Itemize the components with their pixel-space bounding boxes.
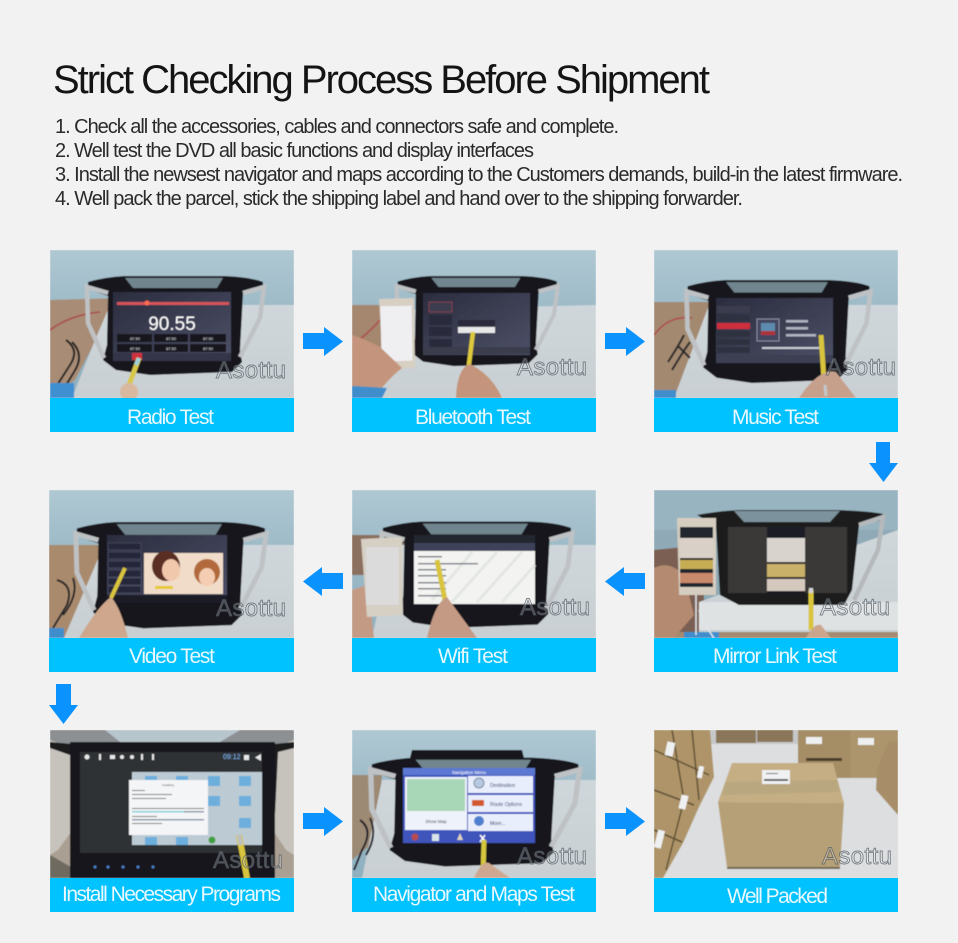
- label: Wifi Test: [438, 645, 508, 668]
- label: Navigator and Maps Test: [373, 883, 575, 906]
- photo: radio test: 87.50: [166, 346, 177, 351]
- photo: install necessary programs: 09:12: [223, 754, 241, 761]
- photo: video test: [49, 490, 294, 638]
- panel: well packed: [654, 730, 898, 912]
- panel: mirror link test: [654, 490, 898, 672]
- text block: checking steps: [55, 116, 903, 210]
- watermark: Asottu: [826, 354, 896, 381]
- photo: navigator and maps test: Navigation Menu: [452, 770, 486, 775]
- arrow: right: [605, 807, 645, 836]
- photo: bluetooth test: [352, 250, 596, 398]
- panel: radio test: [50, 250, 294, 432]
- panel: navigator and maps test: [352, 730, 596, 912]
- photo: install necessary programs: Installing: [162, 783, 174, 787]
- watermark: Asottu: [517, 354, 587, 381]
- title: Strict Checking Process Before Shipment: [53, 58, 710, 102]
- photo: radio test: 87.50: [203, 336, 214, 341]
- label banner: [49, 638, 294, 672]
- photo: navigator and maps test: [352, 730, 596, 878]
- label banner: [654, 638, 898, 672]
- arrow: left: [303, 567, 343, 596]
- text block: checking steps: 2. Well test the DVD all basic functions and display interfaces: [55, 140, 534, 162]
- watermark: Asottu: [822, 843, 892, 870]
- arrow: right: [303, 807, 343, 836]
- label banner: [50, 878, 294, 912]
- watermark: Asottu: [520, 594, 590, 621]
- photo: wifi test: [352, 490, 596, 638]
- photo: navigator and maps test: More...: [490, 821, 506, 827]
- panel: wifi test: [352, 490, 596, 672]
- panel: bluetooth test: [352, 250, 596, 432]
- panel: install necessary programs: [50, 730, 294, 912]
- photo: install necessary programs: [50, 730, 294, 878]
- text block: checking steps: 1. Check all the accessories, cables and connectors safe and complete.: [55, 116, 619, 138]
- text block: checking steps: 4. Well pack the parcel, stick the shipping label and hand over to the shipping forwarder.: [55, 188, 743, 210]
- photo: radio test: 87.50: [203, 346, 214, 351]
- label: Mirror Link Test: [713, 645, 837, 668]
- photo: music test: [654, 250, 898, 398]
- photo: radio test: 87.50: [166, 336, 177, 341]
- arrow: right: [605, 327, 645, 356]
- arrow: down: [49, 684, 78, 724]
- label banner: [352, 398, 596, 432]
- label banner: [50, 398, 294, 432]
- photo: navigator and maps test: Destination: [490, 783, 515, 789]
- label banner: [654, 878, 898, 912]
- watermark: Asottu: [216, 595, 286, 622]
- label: Well Packed: [727, 885, 828, 908]
- arrow: down: [869, 442, 898, 482]
- panel: music test: [654, 250, 898, 432]
- photo: radio test: 87.50: [130, 346, 141, 351]
- photo: radio test: 90.55: [148, 314, 196, 335]
- label banner: [352, 638, 596, 672]
- label: Install Necessary Programs: [62, 883, 281, 906]
- photo: navigator and maps test: Show Map: [425, 819, 447, 824]
- label: Bluetooth Test: [415, 406, 531, 429]
- label banner: [654, 398, 898, 432]
- watermark: Asottu: [213, 847, 283, 874]
- photo: radio test: [50, 250, 294, 398]
- photo: mirror link test: [654, 490, 898, 638]
- panel: video test: [49, 490, 294, 672]
- arrow: left: [605, 567, 645, 596]
- label banner: [352, 878, 596, 912]
- label: Music Test: [732, 406, 819, 429]
- photo: navigator and maps test: Route Options: [490, 802, 522, 808]
- watermark: Asottu: [820, 594, 890, 621]
- arrow: right: [303, 327, 343, 356]
- label: Radio Test: [127, 406, 214, 429]
- label: Video Test: [129, 645, 215, 668]
- photo: well packed: [654, 730, 898, 878]
- watermark: Asottu: [517, 843, 587, 870]
- text block: checking steps: 3. Install the newsest navigator and maps according to the Customers demands, build-in the latest firmware.: [55, 164, 903, 186]
- watermark: Asottu: [216, 357, 286, 384]
- photo: radio test: 87.50: [130, 336, 141, 341]
